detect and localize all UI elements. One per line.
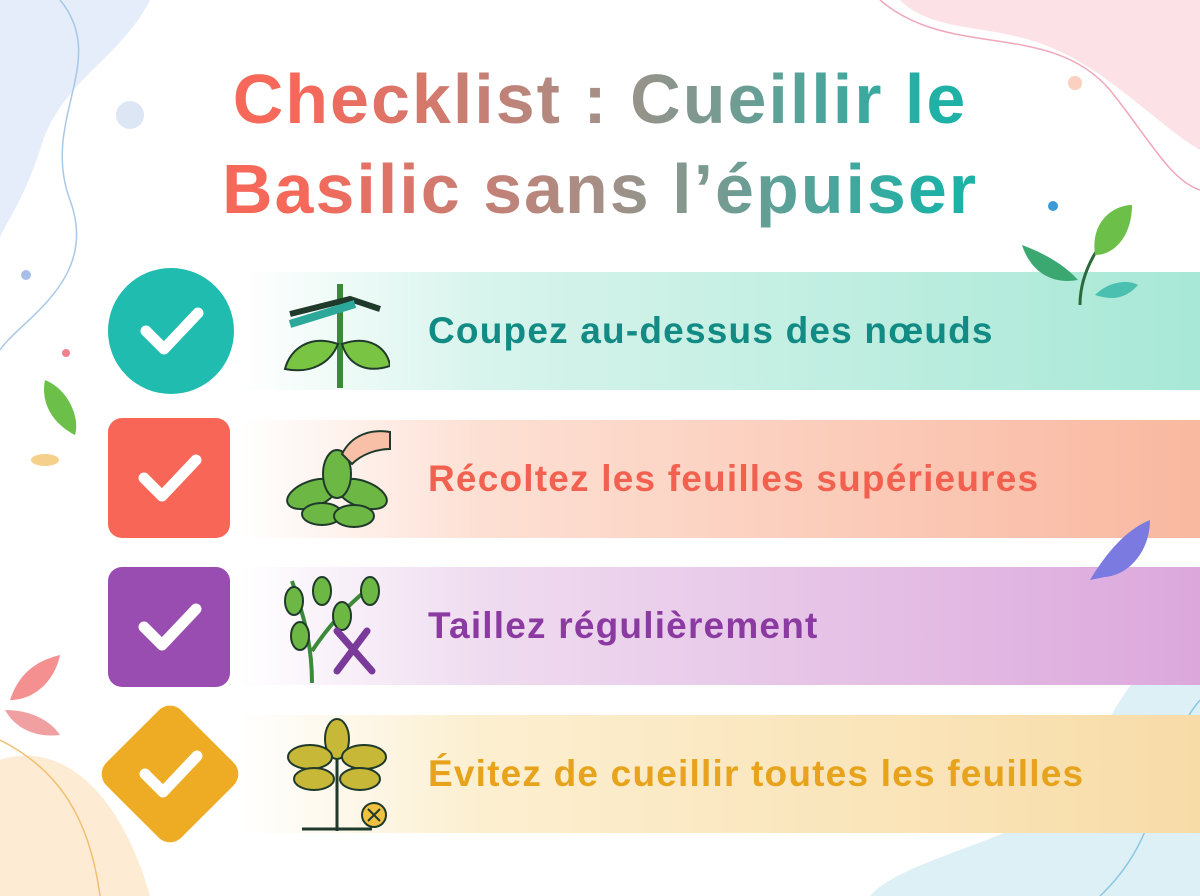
- icon: purple check square: [108, 567, 230, 687]
- icon: decorative leaves left: [31, 380, 76, 466]
- icon: decorative leaves top right: [1022, 205, 1138, 305]
- icon: teal check circle: [108, 268, 234, 394]
- icon: hand picking leaves: [286, 430, 391, 528]
- icon: yellow check diamond: [95, 699, 245, 849]
- icon: decorative purple leaf: [1090, 520, 1150, 580]
- panel: row 2: [108, 418, 1200, 538]
- icon: coral check square: [108, 418, 230, 538]
- panel: row 4: [102, 706, 1200, 842]
- title: Basilic sans l’épuiser: [222, 150, 978, 228]
- title: [0, 54, 1200, 234]
- icon: shears on stem: [284, 284, 390, 388]
- panel: row 1: [108, 268, 1200, 394]
- text: Coupez au-dessus des nœuds: [428, 310, 994, 351]
- text: Taillez régulièrement: [428, 605, 819, 646]
- icon: pruning branches: [284, 576, 380, 683]
- text: Évitez de cueillir toutes les feuilles: [428, 753, 1084, 794]
- title: Checklist : Cueillir le: [233, 60, 967, 138]
- text: Récoltez les feuilles supérieures: [428, 458, 1039, 499]
- icon: decorative pink leaves: [5, 655, 60, 736]
- panel: row 3: [108, 567, 1200, 687]
- icon: plant with cross: [287, 718, 387, 831]
